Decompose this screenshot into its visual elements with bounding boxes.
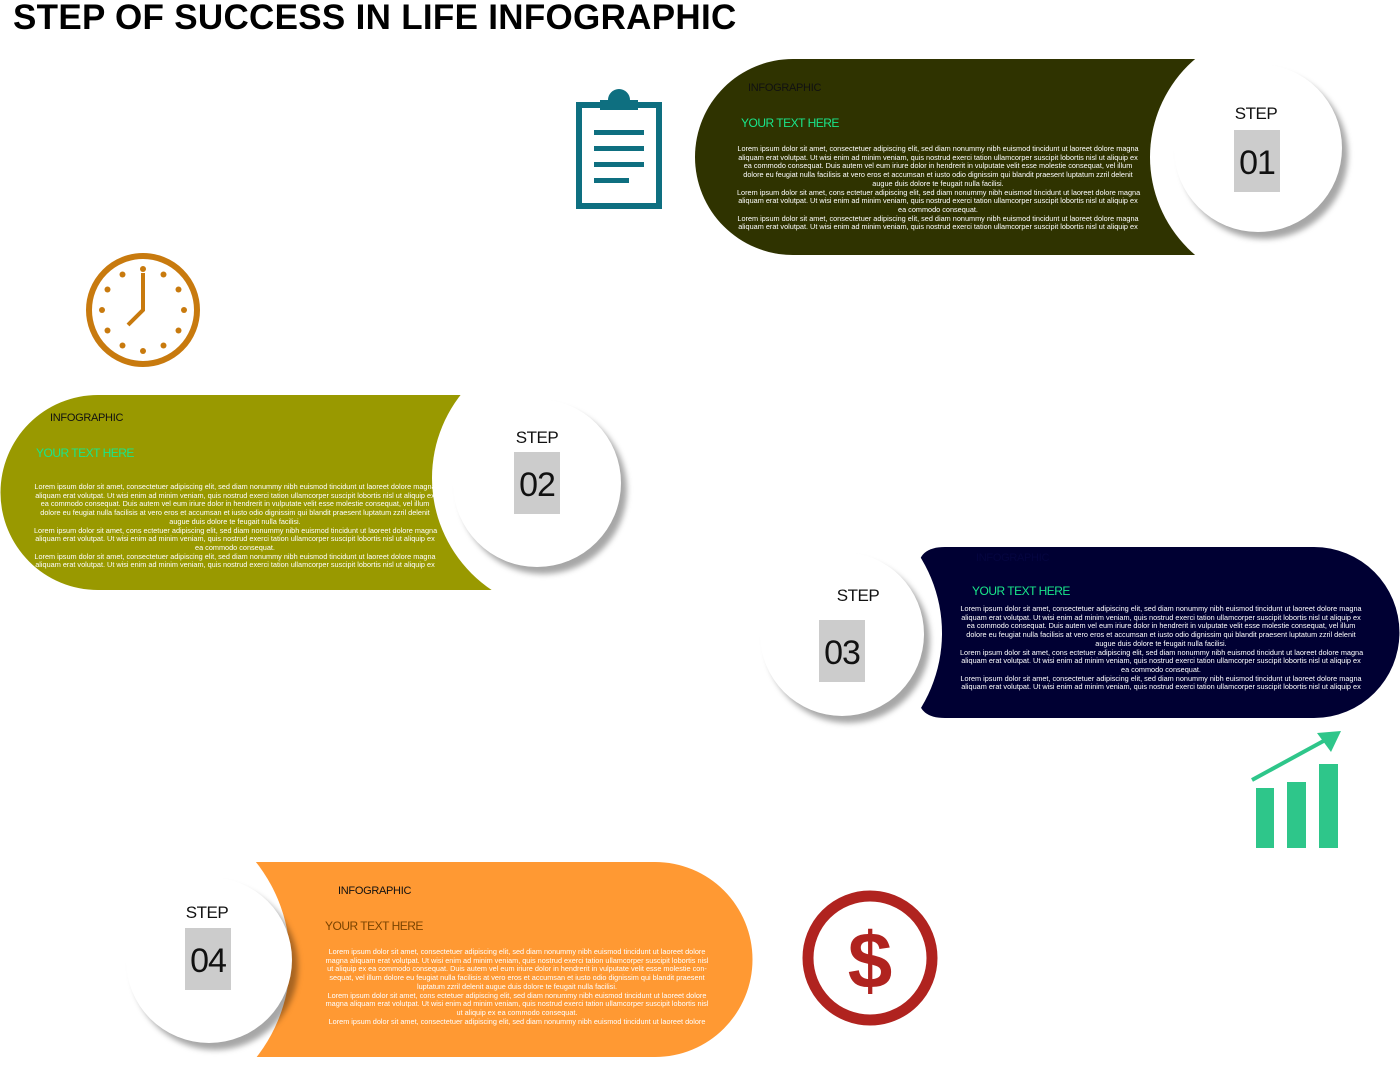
panel: step 03: ea commodo consequat. Duis autem vel eum iriure dolor in hendrerit in vulputate velit esse molestie consequat, vel illum bbox=[967, 621, 1355, 630]
panel: step 01: Lorem ipsum dolor sit amet, consectetuer adipiscing elit, sed diam nonummy nibh euismod tincidunt ut laoreet dolore magna bbox=[737, 214, 1139, 223]
panel: step 03: ea commodo consequat. bbox=[1121, 665, 1201, 674]
panel: step 02: aliquam erat volutpat. Ut wisi enim ad minim veniam, quis nostrud exerci tation ullamcorper suscipit lobortis nisl ut aliquip ex bbox=[35, 491, 435, 500]
panel: step 04: magna aliquam erat volutpat. Ut wisi enim ad minim veniam, quis nostrud exerci tation ullamcorper suscipit lobortis nisl bbox=[326, 956, 708, 965]
step circle 04: 04 bbox=[190, 942, 226, 980]
panel: step 01 bbox=[695, 59, 1352, 255]
icon: dollar coin bbox=[802, 890, 938, 1026]
icon: dollar coin: $ bbox=[848, 916, 892, 1005]
panel: step 03: aliquam erat volutpat. Ut wisi enim ad minim veniam, quis nostrud exerci tation ullamcorper suscipit lobortis nisl ut aliquip ex bbox=[961, 656, 1361, 665]
step circle 03: STEP bbox=[837, 586, 879, 605]
panel: step 03: aliquam erat volutpat. Ut wisi enim ad minim veniam, quis nostrud exerci tation ullamcorper suscipit lobortis nisl ut aliquip ex bbox=[961, 613, 1361, 622]
panel: step 04: Lorem ipsum dolor sit amet, consectetuer adipiscing elit, sed diam nonummy nibh euismod tincidunt ut laoreet dolore bbox=[329, 1017, 705, 1026]
panel: step 01: augue duis dolore te feugait nulla facilisi. bbox=[872, 179, 1004, 188]
panel: step 03: augue duis dolore te feugait nulla facilisi. bbox=[1095, 639, 1227, 648]
icon: growth chart bbox=[1251, 731, 1341, 848]
panel: step 04: YOUR TEXT HERE bbox=[325, 919, 423, 933]
step circle 02: STEP bbox=[516, 428, 558, 447]
panel: step 01: INFOGRAPHIC bbox=[748, 82, 821, 94]
panel: step 02: dolore eu feugiat nulla facilisis at vero eros et accumsan et iusto odio dignissim qui blandit praesent luptatum zzril delenit bbox=[40, 508, 430, 517]
panel: step 04: magna aliquam erat volutpat. Ut wisi enim ad minim veniam, quis nostrud exerci tation ullamcorper suscipit lobortis nisl bbox=[326, 999, 708, 1008]
panel: step 02: INFOGRAPHIC bbox=[50, 412, 123, 424]
panel: step 02 bbox=[0, 395, 630, 590]
panel: step 03: dolore eu feugiat nulla facilisis at vero eros et accumsan et iusto odio dignissim qui blandit praesent luptatum zzril delenit bbox=[966, 630, 1356, 639]
panel: step 01: aliquam erat volutpat. Ut wisi enim ad minim veniam, quis nostrud exerci tation ullamcorper suscipit lobortis nisl ut aliquip ex bbox=[738, 196, 1138, 205]
panel: step 03: Lorem ipsum dolor sit amet, cons ectetuer adipiscing elit, sed diam nonummy nibh euismod tincidunt ut laoreet dolore magna bbox=[960, 648, 1363, 657]
panel: step 04: INFOGRAPHIC bbox=[338, 885, 411, 897]
panel: step 02: aliquam erat volutpat. Ut wisi enim ad minim veniam, quis nostrud exerci tation ullamcorper suscipit lobortis nisl ut aliquip ex bbox=[35, 560, 435, 569]
panel: step 01: YOUR TEXT HERE bbox=[741, 116, 839, 130]
panel: step 03 bbox=[766, 547, 1400, 726]
panel: step 04 bbox=[132, 862, 752, 1057]
panel: step 03: YOUR TEXT HERE bbox=[972, 584, 1070, 598]
panel: step 04: sequat, vel illum dolore eu feugiat nulla facilisis at vero eros et accumsan et iusto odio dignissim qui blandit praesent bbox=[329, 973, 705, 982]
panel: step 04: ut aliquip ex ea commodo consequat. Duis autem vel eum iriure dolor in hendrerit in vulputate velit esse molestie con- bbox=[327, 964, 707, 973]
panel: step 01: aliquam erat volutpat. Ut wisi enim ad minim veniam, quis nostrud exerci tation ullamcorper suscipit lobortis nisl ut aliquip ex bbox=[738, 222, 1138, 231]
panel: step 01: Lorem ipsum dolor sit amet, cons ectetuer adipiscing elit, sed diam nonummy nibh euismod tincidunt ut laoreet dolore magna bbox=[737, 188, 1140, 197]
panel: step 04: ut aliquip ex ea commodo consequat. bbox=[457, 1008, 577, 1017]
icon: clipboard bbox=[576, 89, 662, 209]
panel: step 03: INFOGRAPHIC bbox=[976, 552, 1049, 564]
panel: step 04: Lorem ipsum dolor sit amet, consectetuer adipiscing elit, sed diam nonummy nibh euismod tincidunt ut laoreet dolore bbox=[329, 947, 705, 956]
panel: step 02: ea commodo consequat. Duis autem vel eum iriure dolor in hendrerit in vulputate velit esse molestie consequat, vel illum bbox=[41, 499, 429, 508]
panel: step 04: Lorem ipsum dolor sit amet, cons ectetuer adipiscing elit, sed diam nonummy nibh euismod tincidunt ut laoreet dolore bbox=[328, 991, 706, 1000]
step circle 03 bbox=[760, 552, 924, 716]
step circle 01: 01 bbox=[1239, 144, 1275, 182]
panel: step 01: ea commodo consequat. bbox=[898, 205, 978, 214]
panel: step 02: Lorem ipsum dolor sit amet, cons ectetuer adipiscing elit, sed diam nonummy nibh euismod tincidunt ut laoreet dolore magna bbox=[34, 526, 437, 535]
panel: step 01: dolore eu feugiat nulla facilisis at vero eros et accumsan et iusto odio dignissim qui blandit praesent luptatum zzril delenit bbox=[743, 170, 1133, 179]
step circle 01 bbox=[1174, 64, 1342, 232]
panel: step 02: ea commodo consequat. bbox=[195, 543, 275, 552]
panel: step 02: augue duis dolore te feugait nulla facilisi. bbox=[169, 517, 301, 526]
panel: step 01: Lorem ipsum dolor sit amet, consectetuer adipiscing elit, sed diam nonummy nibh euismod tincidunt ut laoreet dolore magna bbox=[737, 144, 1139, 153]
panel: step 01: ea commodo consequat. Duis autem vel eum iriure dolor in hendrerit in vulputate velit esse molestie consequat, vel illum bbox=[744, 161, 1132, 170]
panel: step 02: Lorem ipsum dolor sit amet, consectetuer adipiscing elit, sed diam nonummy nibh euismod tincidunt ut laoreet dolore magna bbox=[34, 552, 436, 561]
panel: step 02: YOUR TEXT HERE bbox=[36, 446, 134, 460]
step circle 03: 03 bbox=[824, 634, 860, 672]
step circle 04 bbox=[126, 877, 292, 1043]
panel: step 02: Lorem ipsum dolor sit amet, consectetuer adipiscing elit, sed diam nonummy nibh euismod tincidunt ut laoreet dolore magna bbox=[34, 482, 436, 491]
panel: step 01: aliquam erat volutpat. Ut wisi enim ad minim veniam, quis nostrud exerci tation ullamcorper suscipit lobortis nisl ut aliquip ex bbox=[738, 153, 1138, 162]
step circle 02 bbox=[453, 399, 621, 567]
panel: step 03: Lorem ipsum dolor sit amet, consectetuer adipiscing elit, sed diam nonummy nibh euismod tincidunt ut laoreet dolore magna bbox=[960, 604, 1362, 613]
icon: clock bbox=[86, 253, 200, 367]
step circle 01: STEP bbox=[1235, 104, 1277, 123]
step circle 02: 02 bbox=[519, 466, 555, 504]
panel: step 03: Lorem ipsum dolor sit amet, consectetuer adipiscing elit, sed diam nonummy nibh euismod tincidunt ut laoreet dolore magna bbox=[960, 674, 1362, 683]
panel: step 03: aliquam erat volutpat. Ut wisi enim ad minim veniam, quis nostrud exerci tation ullamcorper suscipit lobortis nisl ut aliquip ex bbox=[961, 682, 1361, 691]
step circle 04: STEP bbox=[186, 903, 228, 922]
panel: step 04: luptatum zzril delenit augue duis dolore te feugait nulla facilisi. bbox=[417, 982, 617, 991]
panel: step 02: aliquam erat volutpat. Ut wisi enim ad minim veniam, quis nostrud exerci tation ullamcorper suscipit lobortis nisl ut aliquip ex bbox=[35, 534, 435, 543]
